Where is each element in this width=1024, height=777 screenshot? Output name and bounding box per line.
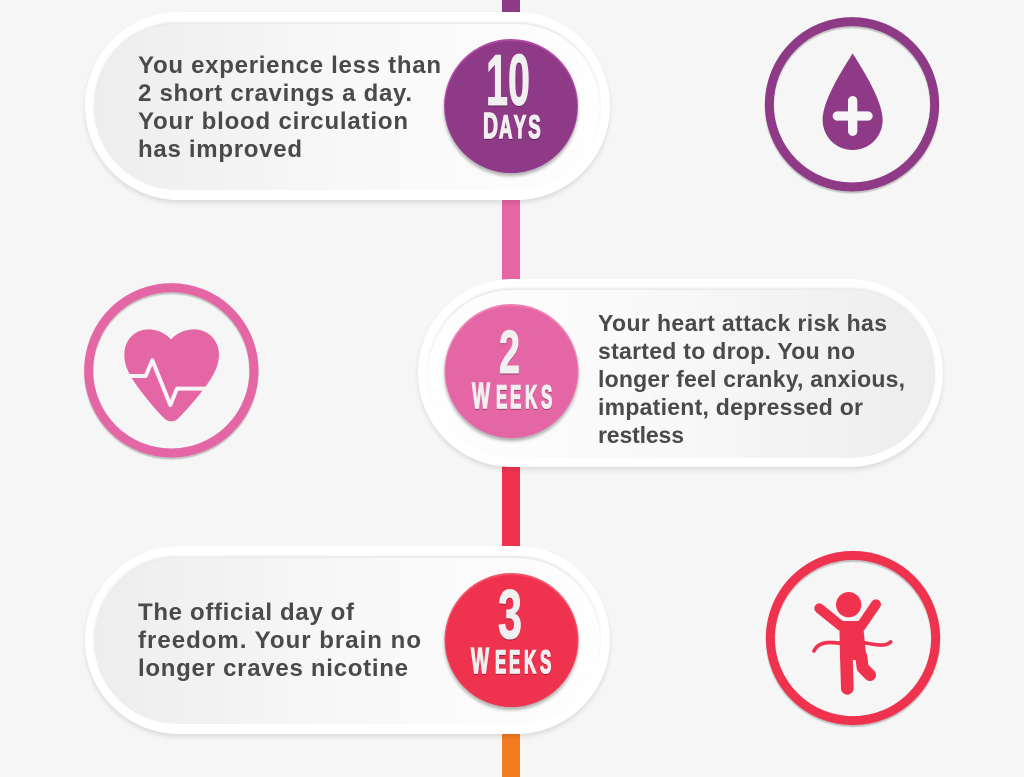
text: 2 weeks description <box>598 310 905 448</box>
panel: 10 days <box>85 12 610 203</box>
badge: 10 days: 10 <box>486 41 530 121</box>
badge: 2 weeks: WEEKS <box>472 377 552 417</box>
text: 3 weeks description: freedom. Your brain no <box>138 627 421 654</box>
text: 2 weeks description: started to drop. You no <box>598 338 855 364</box>
badge: 10 days: DAYS <box>483 106 541 147</box>
text: 2 weeks description: restless <box>598 422 684 448</box>
text: 10 days description: 2 short cravings a day. <box>138 80 412 107</box>
text: 10 days description: has improved <box>138 136 302 163</box>
badge: 10 days <box>444 39 578 176</box>
timeline line <box>502 0 520 777</box>
icon: heart with pulse <box>89 288 254 455</box>
text: 2 weeks description: impatient, depressed or <box>598 394 863 420</box>
badge: 3 weeks: 3 <box>498 575 522 653</box>
icon: person crossing finish line <box>770 555 936 723</box>
text: 10 days description <box>138 52 441 163</box>
text: 3 weeks description: The official day of <box>138 599 355 626</box>
badge: 3 weeks: WEEKS <box>471 642 551 682</box>
text: 2 weeks description: longer feel cranky, anxious, <box>598 366 905 392</box>
badge: 2 weeks <box>444 304 578 441</box>
badge: 2 weeks: 2 <box>499 318 520 386</box>
text: 2 weeks description: Your heart attack risk has <box>598 310 887 336</box>
badge: 3 weeks <box>444 573 578 710</box>
text: 3 weeks description: longer craves nicotine <box>138 655 408 682</box>
panel: 2 weeks <box>418 279 943 470</box>
icon: blood drop <box>769 22 935 189</box>
panel: 3 weeks <box>85 546 610 737</box>
text: 3 weeks description <box>138 599 421 682</box>
text: 10 days description: You experience less than <box>138 52 441 79</box>
text: 10 days description: Your blood circulation <box>138 108 408 135</box>
